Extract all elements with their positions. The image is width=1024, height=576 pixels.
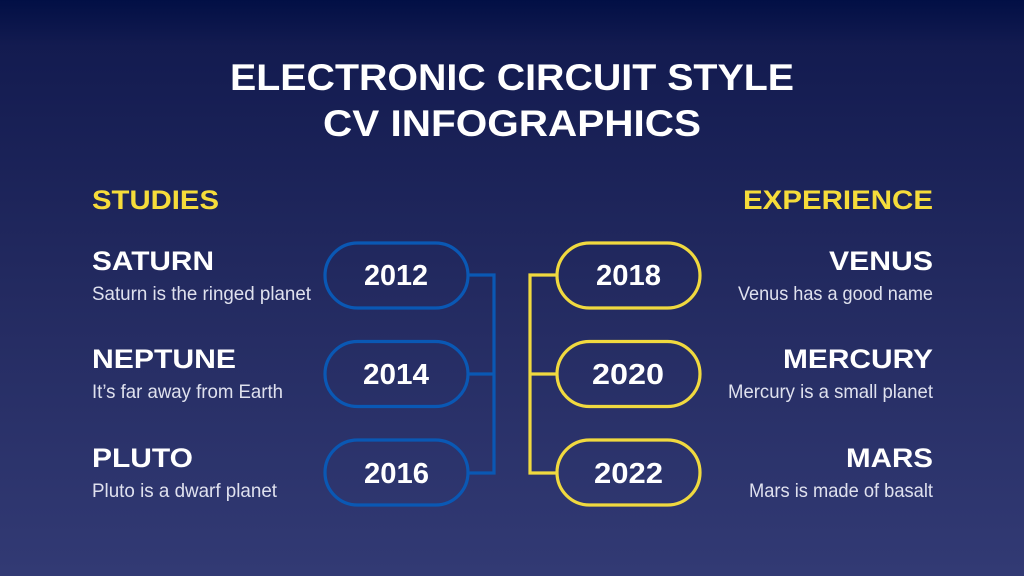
pill: 2016 [325,440,468,505]
pill: 2012: 2012 [364,260,428,292]
panel: experience [728,185,934,502]
text block: Mercury: Mercury is a small planet [728,381,934,403]
panel: studies [92,185,312,502]
title [230,57,794,144]
text block: Venus [738,246,933,305]
text block: Saturn [92,246,312,305]
text block: Neptune [92,344,283,403]
text block: Mercury: MERCURY [783,344,933,374]
text block: Mars: MARS [846,443,933,473]
heading: experience: EXPERIENCE [743,185,933,215]
connector: studies circuit [468,275,494,473]
pill: 2018 [557,243,700,308]
pill: 2016: 2016 [364,458,429,490]
text block: Neptune: NEPTUNE [92,344,236,374]
pill: 2022: 2022 [594,458,663,490]
text block: Mars: Mars is made of basalt [749,480,934,502]
pill: 2022 [557,440,700,505]
text block: Pluto: PLUTO [92,443,193,473]
text block: Saturn: Saturn is the ringed planet [92,283,312,305]
text block: Neptune: It’s far away from Earth [92,381,283,403]
text block: Pluto [92,443,278,502]
text block: Pluto: Pluto is a dwarf planet [92,480,278,502]
text block: Venus: Venus has a good name [738,283,933,305]
text block: Venus: VENUS [829,246,933,276]
heading: studies: STUDIES [92,185,219,215]
pill: 2020: 2020 [592,359,664,391]
pill: 2012 [325,243,468,308]
text block: Mars [749,443,934,502]
title: CV INFOGRAPHICS [323,103,701,144]
text block: Mercury [728,344,934,403]
pill: 2020 [557,342,700,406]
text block: Saturn: SATURN [92,246,214,276]
pill: 2018: 2018 [596,260,661,292]
title: ELECTRONIC CIRCUIT STYLE [230,57,794,98]
pill: 2014 [325,342,468,406]
pill: 2014: 2014 [363,359,429,391]
connector: experience circuit [530,275,557,473]
